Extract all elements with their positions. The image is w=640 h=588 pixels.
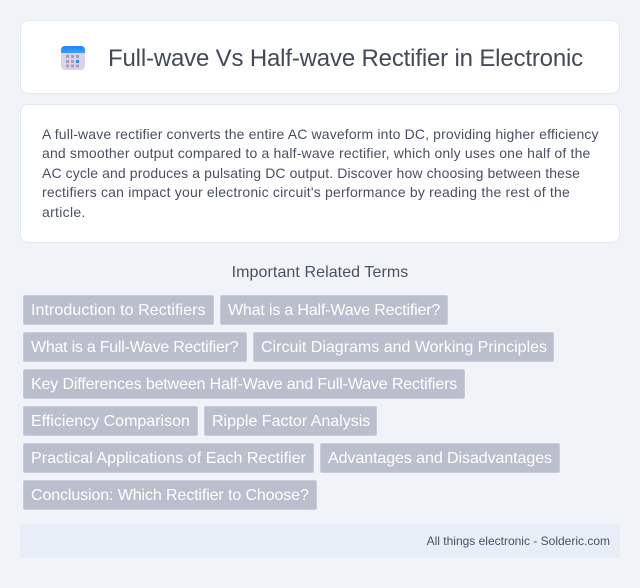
intro paragraph: and smoother output compared to a half-wave rectifier, which only uses one half of the xyxy=(42,145,590,161)
tag xyxy=(23,332,247,362)
tag: Ripple Factor Analysis xyxy=(212,413,370,430)
intro paragraph: A full-wave rectifier converts the entire AC waveform into DC, providing higher efficiency xyxy=(42,126,599,142)
tag xyxy=(204,406,377,436)
tag xyxy=(220,295,448,325)
tag: Circuit Diagrams and Working Principles xyxy=(261,339,547,356)
tag xyxy=(23,480,317,510)
tag: Key Differences between Half-Wave and Full-Wave Rectifiers xyxy=(31,376,457,393)
tag xyxy=(23,369,465,399)
tag xyxy=(253,332,554,362)
title: Full-wave Vs Half-wave Rectifier in Electronic xyxy=(108,45,583,72)
header card xyxy=(20,20,620,94)
intro card xyxy=(20,104,620,243)
tag: What is a Full-Wave Rectifier? xyxy=(31,339,238,356)
tag xyxy=(23,295,214,325)
footer bar xyxy=(20,524,620,558)
icon: calendar xyxy=(61,46,85,70)
tags xyxy=(23,295,560,510)
tag: Conclusion: Which Rectifier to Choose? xyxy=(31,487,309,504)
tag: Efficiency Comparison xyxy=(31,413,190,430)
intro paragraph: rectifiers can impact your electronic circuit's performance by reading the rest of the xyxy=(42,184,570,200)
tag xyxy=(23,406,198,436)
tag: Advantages and Disadvantages xyxy=(328,450,552,467)
intro paragraph: article. xyxy=(42,204,86,220)
tag xyxy=(320,443,560,473)
heading: important related terms: Important Related Terms xyxy=(232,264,408,281)
intro paragraph xyxy=(42,126,599,220)
tag: Introduction to Rectifiers xyxy=(31,302,206,319)
footer text: All things electronic - Solderic.com xyxy=(427,534,610,548)
tag: Practical Applications of Each Rectifier xyxy=(31,450,306,467)
intro paragraph: AC cycle and produces a pulsating DC output. Discover how choosing between these xyxy=(42,165,580,181)
tag xyxy=(23,443,314,473)
tag: What is a Half-Wave Rectifier? xyxy=(228,302,440,319)
